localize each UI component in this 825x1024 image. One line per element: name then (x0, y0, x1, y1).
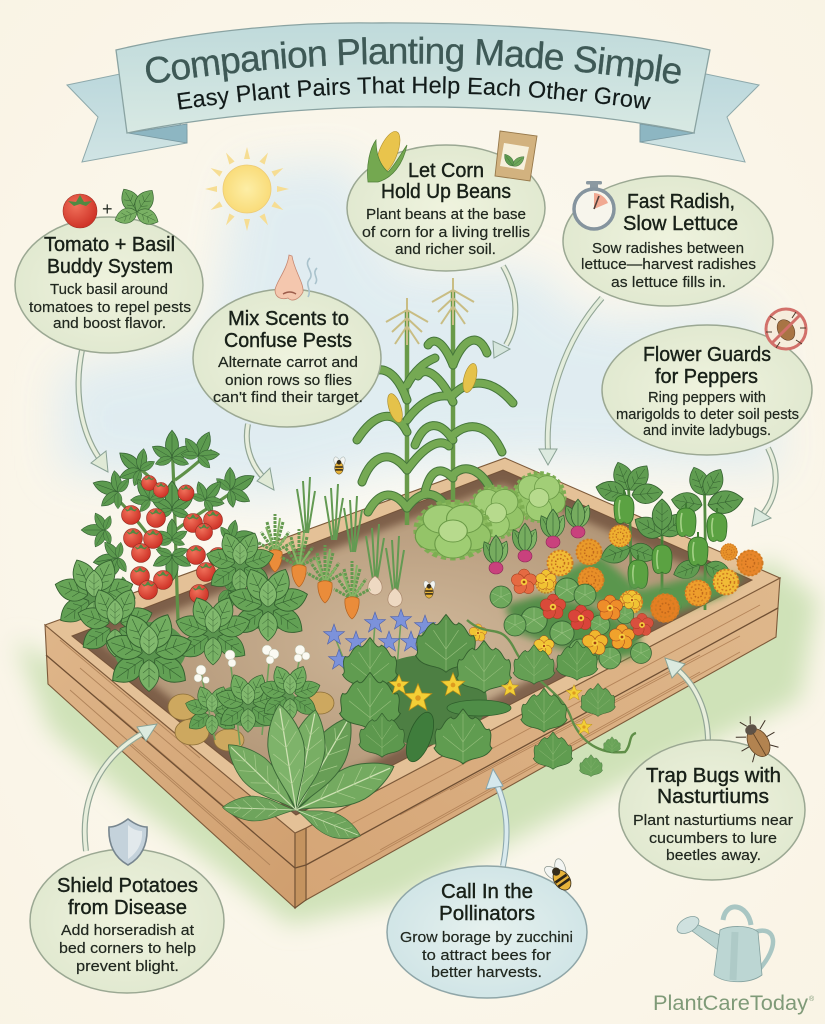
heading: Confuse Pests (224, 330, 352, 352)
icon: tomato plus basil: + (102, 199, 113, 219)
arrow: corn callout to corn (493, 266, 515, 358)
body text: beetles away. (666, 848, 761, 864)
body text: of corn for a living trellis (362, 225, 530, 241)
body text: Grow borage by zucchini (400, 930, 573, 946)
callout: corn and beans (347, 128, 545, 271)
plants: flowering horseradish (183, 645, 322, 745)
soil (72, 470, 752, 815)
logo: PlantCareToday: ® (809, 995, 815, 1003)
ribbon main band (116, 23, 710, 133)
arrow: pollinators callout to zucchini (486, 769, 507, 866)
bee over soil (422, 580, 436, 598)
bed right face (306, 578, 780, 900)
arrow: flower callout to peppers (752, 448, 776, 526)
body text: and boost flavor. (53, 316, 166, 332)
heading: for Peppers (655, 366, 758, 388)
body text: tomatoes to repel pests (29, 300, 191, 316)
callout: tomato and basil (15, 185, 203, 353)
icon: watering can (674, 907, 773, 982)
icon: no bugs sign (766, 309, 806, 349)
body text: cucumbers to lure (649, 831, 777, 847)
callout: radish and lettuce (563, 176, 773, 306)
body text: Ring peppers with (648, 390, 766, 406)
ribbon left tail (67, 74, 187, 162)
icon: beetle (729, 710, 782, 765)
arrow: scents callout to carrots (247, 424, 274, 490)
body text: Plant nasturtiums near (633, 813, 793, 829)
icon: tomato plus basil (63, 185, 161, 228)
heading: Nasturtiums (657, 786, 769, 808)
body text: and richer soil. (395, 242, 496, 258)
icon: bee (540, 855, 579, 896)
body text: marigolds to deter soil pests (616, 407, 799, 423)
plants: carrots (257, 514, 370, 619)
heading: Buddy System (47, 256, 173, 278)
plants: cucumber vine (467, 620, 636, 777)
ribbon folds (128, 124, 695, 143)
plants: corn (357, 278, 513, 525)
callout: flower guards (602, 309, 812, 455)
heading: Flower Guards (643, 344, 771, 366)
logo: PlantCareToday: PlantCareToday (653, 992, 809, 1015)
body text: and invite ladybugs. (643, 423, 771, 439)
bed top rim (45, 458, 780, 833)
arrow: radish callout to radishes (539, 298, 602, 465)
body text: Alternate carrot and (218, 355, 358, 371)
body text: Plant beans at the base (366, 207, 526, 223)
subtitle: Easy Plant Pairs That Help Each Other Grow (177, 76, 651, 110)
icon: sun (205, 147, 289, 231)
plants: potatoes (168, 692, 334, 751)
body text: Add horseradish at (61, 923, 194, 939)
plants: nasturtiums (468, 569, 655, 669)
heading: Shield Potatoes (57, 875, 198, 897)
body text: better harvests. (431, 965, 542, 981)
callout: pollinators (387, 855, 587, 998)
body text: as lettuce fills in. (611, 275, 726, 291)
title ribbon (66, 22, 760, 163)
callout: shield potatoes (30, 819, 224, 993)
ribbon right tail (640, 74, 759, 162)
plants: large horseradish leaves (218, 701, 401, 847)
heading: Call In the (441, 881, 533, 903)
bed left face (45, 625, 295, 908)
callout: mix scents (193, 255, 381, 427)
sky watercolor wash (60, 160, 780, 500)
body text: Sow radishes between (592, 241, 744, 257)
arrow: tomato callout to tomato plant (79, 350, 108, 472)
plants: lettuce (415, 473, 565, 558)
heading: Hold Up Beans (381, 181, 511, 203)
main title: Companion Planting Made Simple (146, 36, 681, 86)
heading: Slow Lettuce (623, 213, 738, 235)
heading: Trap Bugs with (646, 765, 781, 787)
bee over carrots (332, 456, 346, 474)
plants: zucchini (340, 614, 519, 765)
arrow: shield callout to potatoes (85, 724, 157, 851)
callout: trap bugs (619, 710, 805, 880)
arrow: trap bugs callout to nasturtiums (665, 658, 708, 742)
icon: nose (275, 255, 317, 300)
plants: onions (297, 477, 404, 607)
plants: tomato (81, 423, 265, 620)
body text: to attract bees for (422, 948, 551, 964)
icon: corn cob (367, 128, 407, 182)
body text: Tuck basil around (50, 282, 168, 298)
body text: prevent blight. (76, 959, 179, 975)
heading: Pollinators (439, 903, 535, 925)
bed corner post (295, 828, 306, 908)
icon: seed packet (495, 131, 537, 181)
plants: borage (324, 609, 436, 700)
plants: peppers (594, 459, 745, 615)
heading: Let Corn (408, 160, 484, 182)
body text: onion rows so flies (225, 373, 352, 389)
heading: Fast Radish, (627, 191, 735, 213)
icon: stopwatch (574, 181, 614, 229)
plants: basil (52, 529, 311, 691)
heading: from Disease (68, 897, 187, 919)
plants: radishes (479, 499, 594, 574)
grass watercolor wash (15, 560, 818, 925)
body text: can't find their target. (213, 390, 363, 406)
raised garden bed (45, 458, 780, 908)
icon: shield (109, 819, 147, 865)
heading: Tomato + Basil (44, 234, 175, 256)
body text: lettuce—harvest radishes (581, 257, 756, 273)
plants: marigolds (536, 525, 763, 622)
heading: Mix Scents to (228, 308, 349, 330)
body text: bed corners to help (59, 941, 196, 957)
